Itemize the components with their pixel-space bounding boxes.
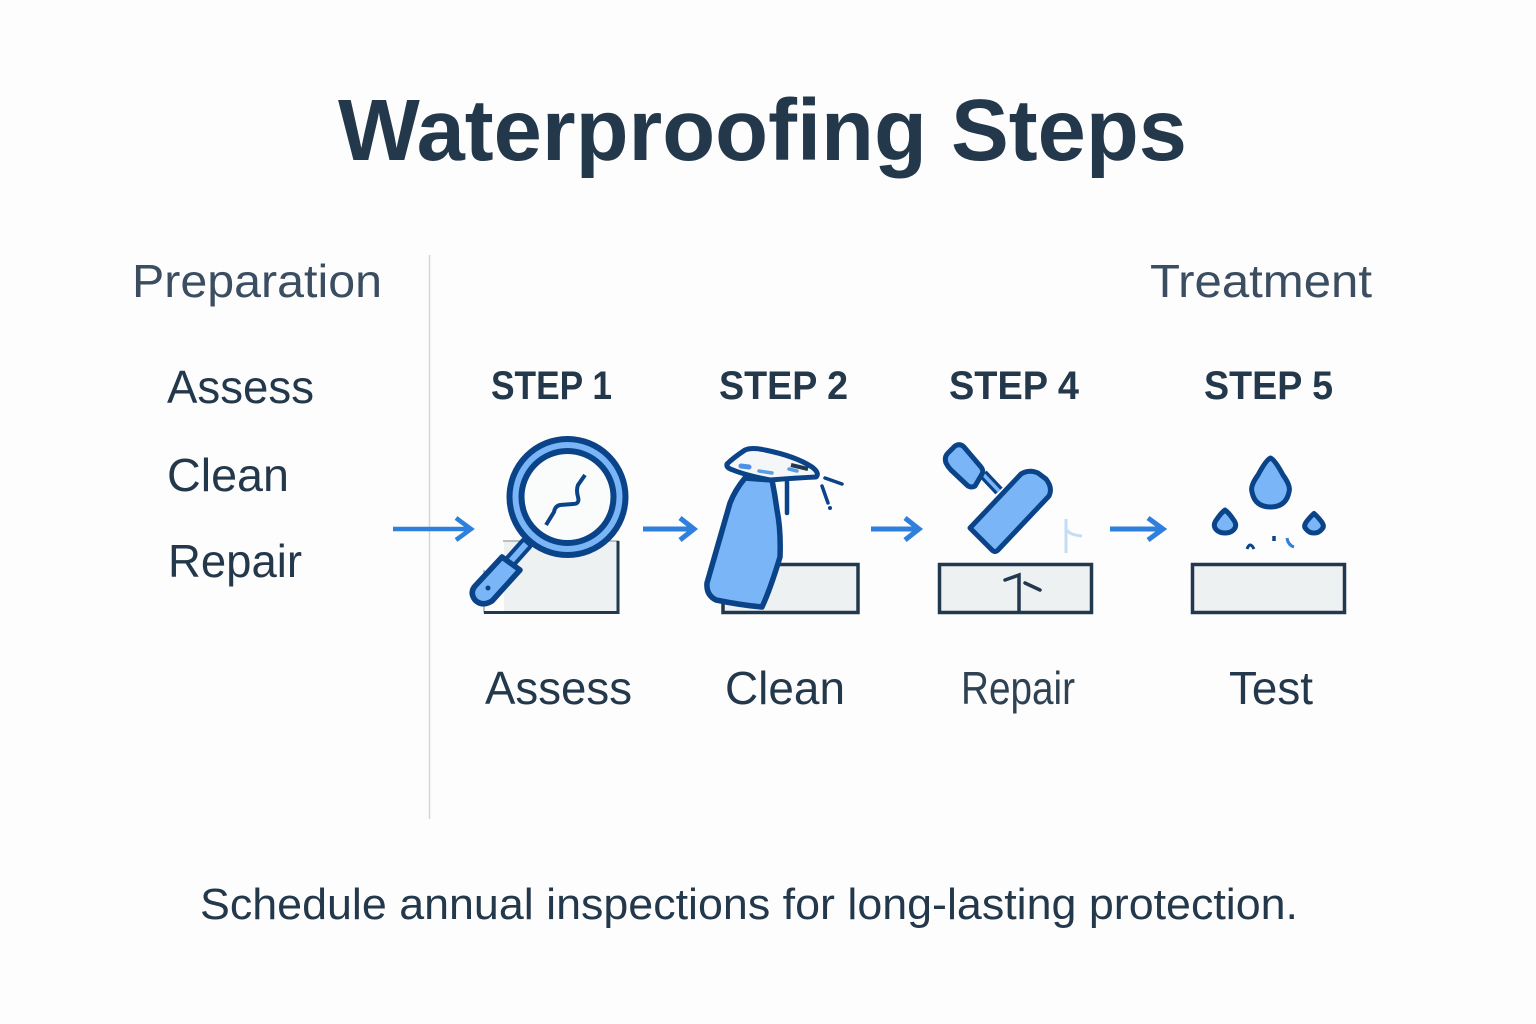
- step 2 name: Clean: [725, 662, 845, 714]
- arrow: step 2 to 4: [871, 518, 919, 540]
- step 4: repair: [940, 364, 1092, 714]
- arrow: step 4 to 5: [1110, 518, 1163, 540]
- step 2 label: STEP 2: [719, 364, 848, 408]
- heading: Treatment: Treatment: [1150, 255, 1372, 307]
- icon: surface: [1192, 564, 1344, 612]
- step 1: assess: [472, 364, 632, 714]
- icon: surface with crack under magnifier: [484, 541, 618, 612]
- step 1 label: STEP 1: [491, 364, 612, 408]
- icon: spray bottle: [707, 448, 842, 607]
- preparation list: Clean: [167, 449, 289, 501]
- arrow: step 1 to 2: [643, 518, 694, 540]
- step 5: test: [1192, 364, 1344, 714]
- icon: cracked surface: [940, 564, 1092, 612]
- preparation list: Repair: [168, 535, 302, 587]
- step 2: clean: [707, 364, 858, 714]
- step 4 name: Repair: [961, 662, 1075, 714]
- icon: surface: [723, 564, 858, 612]
- heading: Preparation: Preparation: [132, 255, 382, 307]
- icon: water drops: [1214, 458, 1323, 549]
- icon: paint roller: [945, 445, 1050, 552]
- footer note: Schedule annual inspections for long-lasting protection.: [200, 880, 1298, 929]
- step 1 name: Assess: [485, 662, 632, 714]
- icon: magnifying glass: [472, 439, 626, 604]
- preparation list: [167, 361, 314, 587]
- step 4 label: STEP 4: [949, 364, 1080, 408]
- icon: faint repair mark: [1066, 519, 1082, 553]
- step 5 name: Test: [1229, 662, 1313, 714]
- preparation list: Assess: [167, 361, 314, 413]
- title: Waterproofing Steps: [338, 82, 1187, 179]
- arrow: to step 1: [393, 518, 471, 540]
- step 5 label: STEP 5: [1204, 364, 1333, 408]
